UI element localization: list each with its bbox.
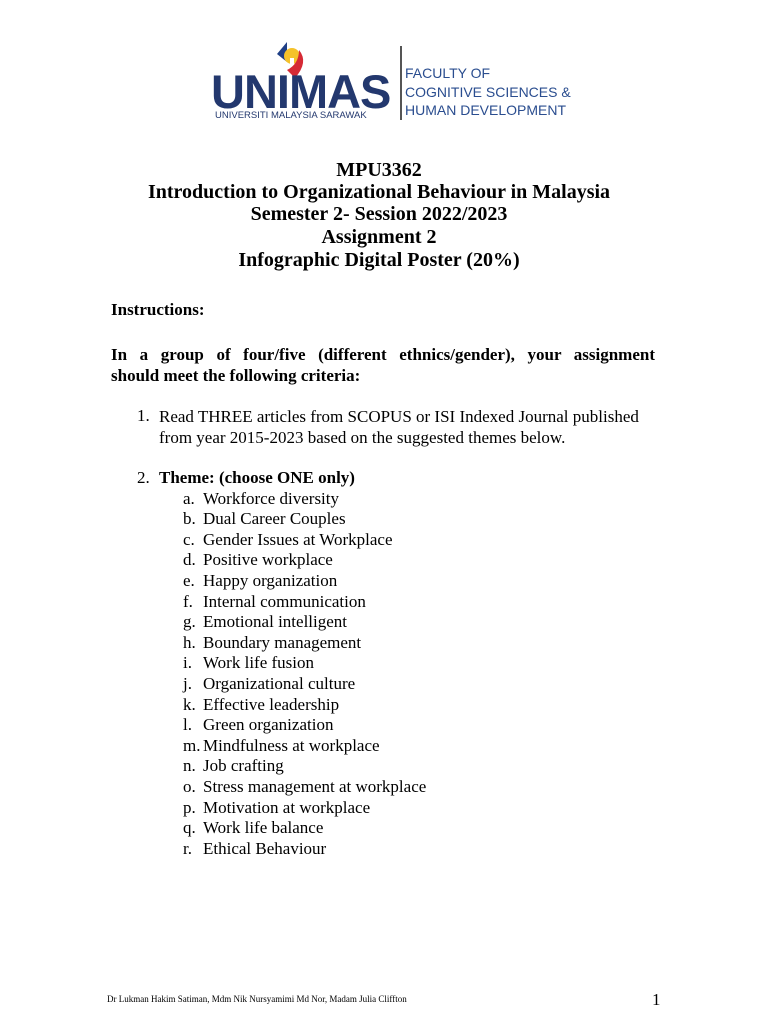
- item 2: themes: k.: [183, 695, 196, 714]
- faculty name: COGNITIVE SCIENCES &: [405, 84, 571, 100]
- item 2: themes: d.: [183, 550, 196, 569]
- item 2: themes: g.: [183, 612, 196, 631]
- item 2: themes: q.: [183, 818, 196, 837]
- group criteria: In a group of four/five (different ethnics/gender), your assignment: [111, 345, 655, 364]
- item 2: themes: Internal communication: [203, 592, 366, 611]
- item 2: themes: Happy organization: [203, 571, 337, 590]
- item 1: from year 2015-2023 based on the suggested themes below.: [159, 428, 565, 447]
- page number: 1: [652, 990, 660, 1009]
- item 2: themes: Green organization: [203, 715, 333, 734]
- item 2: themes: p.: [183, 798, 196, 816]
- item 2: themes: Positive workplace: [203, 550, 333, 569]
- university name: UNIVERSITI MALAYSIA SARAWAK: [215, 110, 367, 121]
- item 2: themes: Dual Career Couples: [203, 509, 346, 528]
- title block: MPU3362: [336, 159, 422, 181]
- item 2: themes: [137, 468, 426, 858]
- title block: Assignment 2: [321, 226, 436, 248]
- item 2: themes: f.: [183, 592, 193, 611]
- item 1: 1.: [137, 406, 150, 425]
- faculty name: FACULTY OF: [405, 65, 490, 81]
- item 2: themes: m.: [183, 736, 200, 755]
- faculty name: HUMAN DEVELOPMENT: [405, 102, 566, 118]
- title block: Infographic Digital Poster (20%): [238, 249, 520, 271]
- item 2: themes: Theme: (choose ONE only): [159, 468, 355, 487]
- title block: Semester 2- Session 2022/2023: [251, 203, 507, 225]
- item 2: themes: Job crafting: [203, 756, 284, 775]
- item 2: themes: Mindfulness at workplace: [203, 736, 380, 755]
- item 2: themes: r.: [183, 839, 192, 858]
- item 2: themes: Ethical Behaviour: [203, 839, 326, 858]
- item 2: themes: o.: [183, 777, 196, 796]
- item 2: themes: l.: [183, 715, 192, 734]
- title block: Introduction to Organizational Behaviour in Malaysia: [148, 181, 610, 203]
- item 2: themes: a.: [183, 489, 195, 508]
- item 2: themes: e.: [183, 571, 195, 590]
- item 2: themes: Stress management at workplace: [203, 777, 426, 796]
- group criteria: [111, 345, 655, 385]
- item 2: themes: Motivation at workplace: [203, 798, 370, 816]
- instructions heading: Instructions:: [111, 300, 205, 319]
- item 2: themes: 2.: [137, 468, 150, 487]
- item 2: themes: Boundary management: [203, 633, 361, 652]
- title block: [148, 159, 610, 271]
- item 2: themes: Work life fusion: [203, 653, 314, 672]
- item 2: themes: n.: [183, 756, 196, 775]
- group criteria: should meet the following criteria:: [111, 366, 360, 385]
- item 2: themes: Organizational culture: [203, 674, 355, 693]
- item 2: themes: Work life balance: [203, 818, 323, 837]
- item 2: themes: h.: [183, 633, 196, 652]
- item 2: themes: Emotional intelligent: [203, 612, 347, 631]
- item 1: Read THREE articles from SCOPUS or ISI Indexed Journal published: [159, 407, 639, 426]
- item 1: [137, 406, 639, 447]
- item 2: themes: Workforce diversity: [203, 489, 339, 508]
- item 2: themes: b.: [183, 509, 196, 528]
- wordmark: UNIMAS: [211, 65, 390, 118]
- item 2: themes: Gender Issues at Workplace: [203, 530, 392, 549]
- item 2: themes: i.: [183, 653, 192, 672]
- footer: Dr Lukman Hakim Satiman, Mdm Nik Nursyamimi Md Nor, Madam Julia Cliffton: [107, 994, 407, 1004]
- item 2: themes: Effective leadership: [203, 695, 339, 714]
- item 2: themes: j.: [183, 674, 192, 693]
- logo: [211, 42, 571, 121]
- item 2: themes: c.: [183, 530, 195, 549]
- icon: emblem: [277, 42, 304, 76]
- faculty name: [405, 65, 571, 118]
